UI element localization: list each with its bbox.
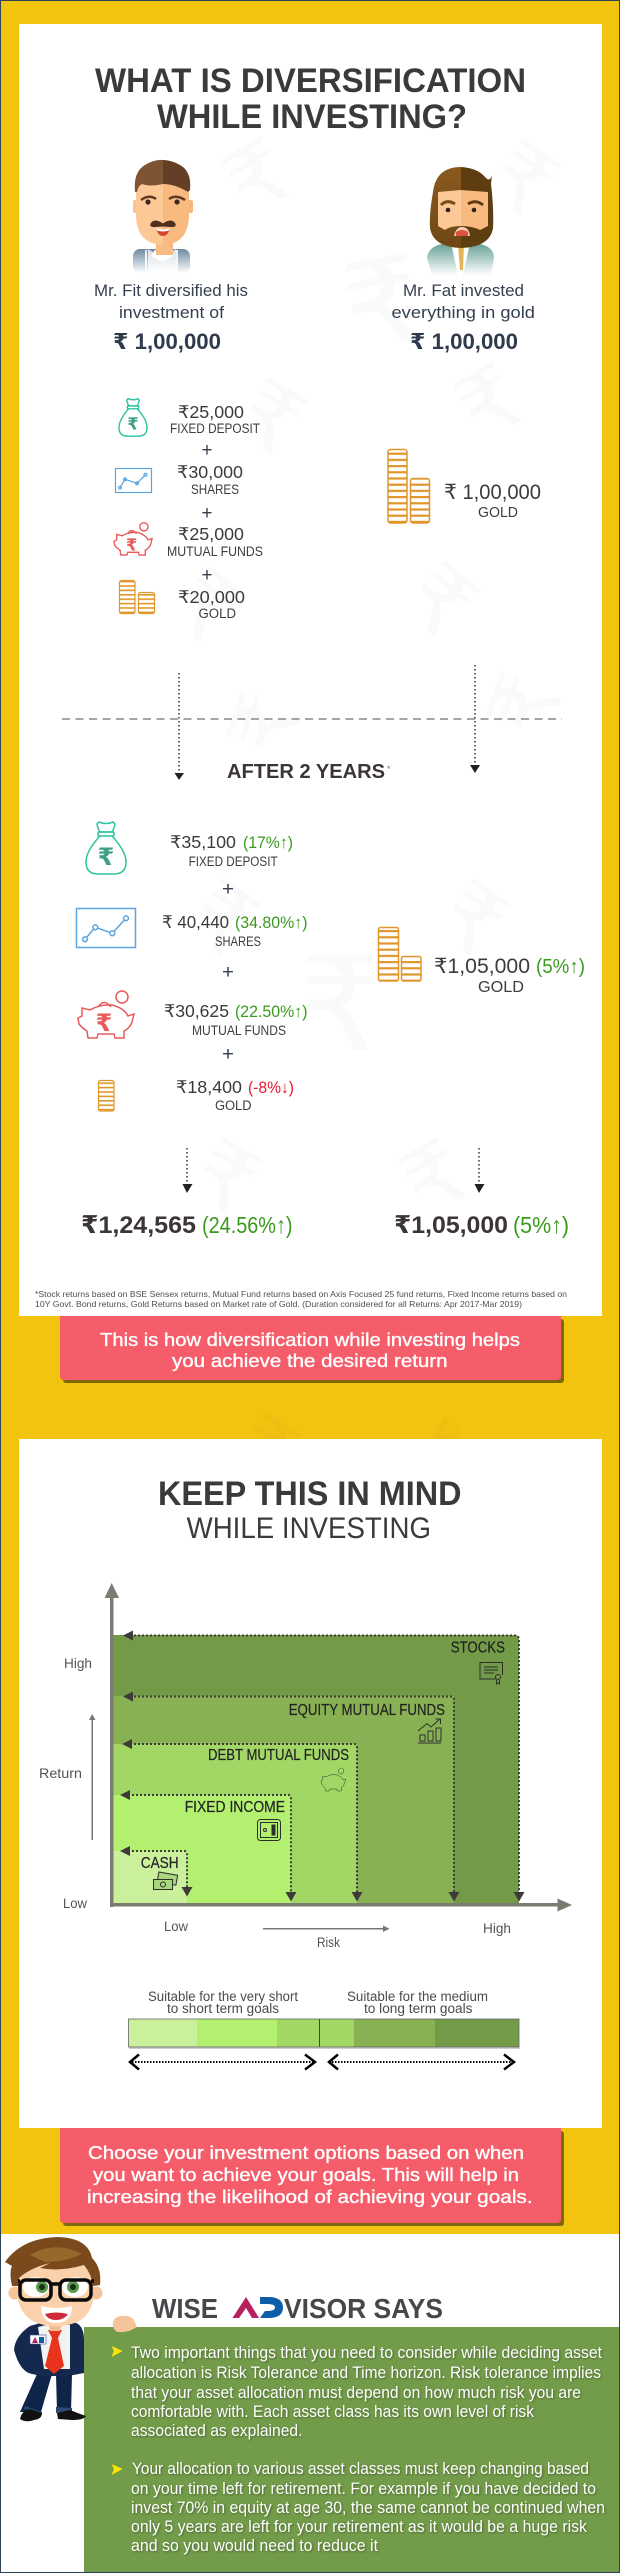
allocation: shares: ₹30,000: [177, 462, 243, 482]
panel: what is diversification: ₹: [419, 861, 526, 979]
result: fixed deposit: ₹35,100: [170, 832, 236, 852]
axis labels: risk: High: [483, 1920, 511, 1936]
allocation: gold: [178, 587, 245, 621]
icon: piggy bank: ₹: [126, 536, 137, 554]
footnote: [35, 1289, 567, 1309]
text: Mr. Fit intro: investment of: [119, 304, 224, 322]
heading: keep this in mind: KEEP THIS IN MIND: [158, 1475, 462, 1513]
panel: what is diversification: ₹: [333, 230, 433, 380]
plus: +: [202, 503, 212, 524]
text: allocation advice: and so you would need to reduce it: [131, 2536, 378, 2555]
text: risk tolerance advice: [131, 2343, 602, 2440]
title: WHAT IS DIVERSIFICATION: [95, 62, 526, 100]
result: mutual funds: (22.50%↑): [235, 1002, 308, 1021]
heading: keep this in mind: [158, 1475, 462, 1545]
axis: risk: [110, 1898, 572, 1912]
icon: money bag large: ₹: [98, 844, 114, 871]
icon: single coin stack: [98, 1080, 114, 1111]
caption: short term goals: [148, 1989, 298, 2016]
text: Mr. Fat intro: Mr. Fat invested: [403, 282, 524, 300]
panel: advisor advice: [84, 2327, 619, 2572]
heading: keep this in mind: WHILE INVESTING: [187, 1512, 431, 1545]
result: mutual funds: MUTUAL FUNDS: [192, 1023, 286, 1038]
plus: +: [222, 1044, 234, 1065]
result: mutual funds: ₹30,625: [164, 1001, 229, 1021]
panel: what is diversification: ₹: [467, 660, 585, 749]
bar: goal horizon: [128, 2019, 520, 2049]
allocation: shares: SHARES: [191, 482, 239, 497]
white advisor background: [1, 2234, 619, 2572]
text: ₹: [404, 1404, 523, 1506]
result: shares: (34.80%↑): [235, 913, 308, 932]
heading: after 2 years: AFTER 2 YEARS: [227, 760, 385, 783]
result: all gold: (5%↑): [536, 956, 585, 978]
plus: +: [222, 879, 234, 900]
footnote: *Stock returns based on BSE Sensex returns, Mutual Fund returns based on Axis Focused 25 fund returns, Fixed Income returns based on: [35, 1289, 567, 1299]
callout: desired return: This is how diversification while investing helps: [100, 1330, 520, 1350]
allocation: all gold: GOLD: [478, 504, 518, 521]
allocation: fixed deposit: [170, 402, 260, 436]
band: debt mutual funds: [113, 1744, 357, 1903]
text: Mr. Fat intro: [392, 282, 535, 322]
label: cash: CASH: [141, 1855, 179, 1872]
label: fixed income: FIXED INCOME: [185, 1799, 285, 1816]
text: Mr. Fit intro: Mr. Fit diversified his: [94, 282, 248, 300]
panel: what is diversification: ₹: [207, 119, 309, 238]
total: Mr. Fat: (5%↑): [513, 1212, 569, 1238]
caption: long term goals: [347, 1989, 488, 2016]
panel: what is diversification: [19, 24, 602, 1316]
allocation: mutual funds: [167, 524, 263, 559]
callout: investment options: you want to achieve your goals. This will help in: [93, 2165, 519, 2185]
icon: certificate: [480, 1662, 502, 1684]
callout: desired return: [60, 1316, 564, 1383]
icon: Mr. Fit portrait: [133, 160, 193, 273]
plus: +: [202, 565, 212, 586]
total: Mr. Fit: (24.56%↑): [202, 1212, 292, 1238]
result: gold: GOLD: [215, 1098, 252, 1113]
arrow: right dotted down: [470, 665, 480, 773]
panel: what is diversification: ₹: [439, 344, 541, 463]
axis labels: return: Low: [63, 1895, 88, 1911]
icon: large gold coins: [388, 450, 430, 523]
icon: gold coins result: [378, 928, 421, 981]
icon: piggy bank: [114, 523, 152, 555]
band: stocks: [113, 1635, 519, 1903]
total: Mr. Fit: ₹1,24,565: [81, 1212, 196, 1239]
plus: +: [222, 962, 234, 983]
axis labels: return: Return: [39, 1765, 82, 1781]
title: WHILE INVESTING?: [157, 98, 467, 136]
result: shares: ₹ 40,440: [162, 912, 229, 932]
text: Mr. Fat intro: everything in gold: [392, 304, 535, 322]
panel: what is diversification: ₹: [384, 1119, 486, 1238]
panel: what is diversification: ₹: [384, 543, 495, 660]
callout: desired return: you achieve the desired return: [172, 1351, 448, 1371]
text: risk tolerance advice: associated as explained.: [131, 2421, 302, 2440]
axis labels: risk: [164, 1918, 511, 1950]
text: risk tolerance advice: comfortable with. Each asset class has its own level of risk: [131, 2402, 534, 2421]
panel: what is diversification: ₹: [469, 121, 576, 239]
result: fixed deposit: [170, 832, 293, 869]
amount: Mr. Fat investment: ₹ 1,00,000: [410, 329, 518, 354]
title: [95, 62, 526, 136]
result: gold: ₹18,400: [176, 1077, 242, 1097]
allocation: gold: GOLD: [198, 606, 236, 621]
allocation: fixed deposit: ₹25,000: [178, 402, 244, 422]
callout: investment options: Choose your investment options based on when: [88, 2143, 524, 2163]
icon: money bag large: [86, 822, 126, 874]
icon: Mr. Fat portrait: [427, 167, 494, 275]
arrow: left dotted down: [174, 673, 184, 780]
arrow: left total: [182, 1148, 192, 1193]
axis labels: return: High: [64, 1655, 92, 1671]
panel: what is diversification: ₹: [219, 359, 321, 478]
band: fixed income: [113, 1795, 291, 1903]
text: allocation advice: on your time left for retirement. For example if you have decided to: [131, 2479, 596, 2498]
axis labels: risk: Risk: [317, 1934, 341, 1950]
result: gold: (-8%↓): [248, 1078, 294, 1097]
icon: piggy bank large: [78, 991, 134, 1038]
label: equity mutual funds: EQUITY MUTUAL FUNDS: [289, 1702, 445, 1719]
arrow: long term span: [329, 2054, 514, 2070]
panel: keep this in mind: [19, 1439, 602, 2128]
panel: what is diversification: ₹: [169, 861, 276, 979]
text: Mr. Fit intro: [94, 282, 248, 322]
arrow: right total: [474, 1148, 484, 1193]
allocation: shares: [177, 462, 243, 497]
label: debt mutual funds: DEBT MUTUAL FUNDS: [208, 1747, 349, 1764]
bullet: [112, 2346, 123, 2357]
label: stocks: STOCKS: [451, 1640, 505, 1657]
plus: +: [202, 440, 212, 461]
amount: Mr. Fit investment: ₹ 1,00,000: [113, 329, 221, 354]
icon: share chart large: [76, 908, 136, 948]
icon: gold coins: [120, 580, 154, 614]
total: Mr. Fat: ₹1,05,000: [394, 1212, 508, 1239]
heading: wise advisor says: VISOR SAYS: [284, 2293, 443, 2324]
panel: what is diversification: ₹: [149, 548, 260, 665]
axis labels: return: [39, 1655, 96, 1911]
result: all gold: GOLD: [478, 979, 524, 996]
result: shares: SHARES: [215, 934, 261, 949]
bullet: [112, 2464, 123, 2475]
result: fixed deposit: FIXED DEPOSIT: [189, 854, 278, 869]
footnote: 10Y Govt. Bond returns, Gold Returns based on Market rate of Gold. (Duration considered for all Returns: Apr 2017-Mar 2019): [35, 1299, 522, 1309]
callout: investment options: [60, 2128, 564, 2226]
caption: short term goals: Suitable for the very short: [148, 1989, 298, 2004]
icon: advisor character: [5, 2237, 137, 2421]
axis: return: [104, 1583, 119, 1907]
icon: safe: [258, 1820, 280, 1840]
allocation: all gold: ₹ 1,00,000: [444, 481, 541, 504]
heading: after 2 years: *: [387, 764, 391, 774]
icon: money bag: ₹: [127, 415, 139, 434]
icon: rising bars: [418, 1719, 441, 1743]
allocation: all gold: [444, 481, 541, 521]
allocation: mutual funds: ₹25,000: [178, 524, 244, 544]
allocation: gold: ₹20,000: [178, 587, 245, 607]
result: gold: [176, 1077, 294, 1113]
result: shares: [162, 912, 308, 949]
icon: piggy bank large: ₹: [96, 1010, 112, 1037]
icon: share chart: [116, 468, 152, 492]
arrow: short term span: [130, 2054, 315, 2070]
result: mutual funds: [164, 1001, 308, 1038]
heading: wise advisor says: [152, 2293, 443, 2324]
band: equity mutual funds: [113, 1696, 454, 1903]
total: Mr. Fit: [81, 1212, 292, 1239]
panel: what is diversification: ₹: [299, 929, 381, 1081]
callout: investment options: increasing the likelihood of achieving your goals.: [87, 2187, 533, 2207]
icon: money bag: [119, 399, 147, 436]
total: Mr. Fat: [394, 1212, 569, 1239]
chart: risk return staircase: [39, 1583, 572, 1950]
icon: banknotes: [154, 1872, 178, 1890]
text: allocation advice: only 5 years are left for your retirement as it would be a huge risk: [131, 2517, 587, 2536]
text: ₹: [214, 1394, 316, 1513]
caption: long term goals: to long term goals: [364, 2001, 473, 2016]
allocation: mutual funds: MUTUAL FUNDS: [167, 544, 263, 559]
result: all gold: [434, 955, 585, 996]
text: risk tolerance advice: that your asset allocation must depend on how much risk you are: [131, 2383, 581, 2402]
heading: wise advisor says: WISE: [152, 2293, 218, 2324]
panel: what is diversification: ₹: [207, 680, 325, 769]
axis labels: risk: Low: [164, 1918, 189, 1934]
allocation: fixed deposit: FIXED DEPOSIT: [170, 421, 260, 436]
caption: long term goals: Suitable for the medium: [347, 1989, 488, 2004]
result: all gold: ₹1,05,000: [434, 955, 530, 978]
text: allocation advice: [131, 2459, 605, 2555]
icon: piggy small: [321, 1768, 346, 1791]
band: cash: [113, 1851, 187, 1903]
caption: short term goals: to short term goals: [167, 2001, 279, 2016]
result: fixed deposit: (17%↑): [243, 833, 293, 852]
panel: what is diversification: ₹: [174, 1119, 276, 1238]
